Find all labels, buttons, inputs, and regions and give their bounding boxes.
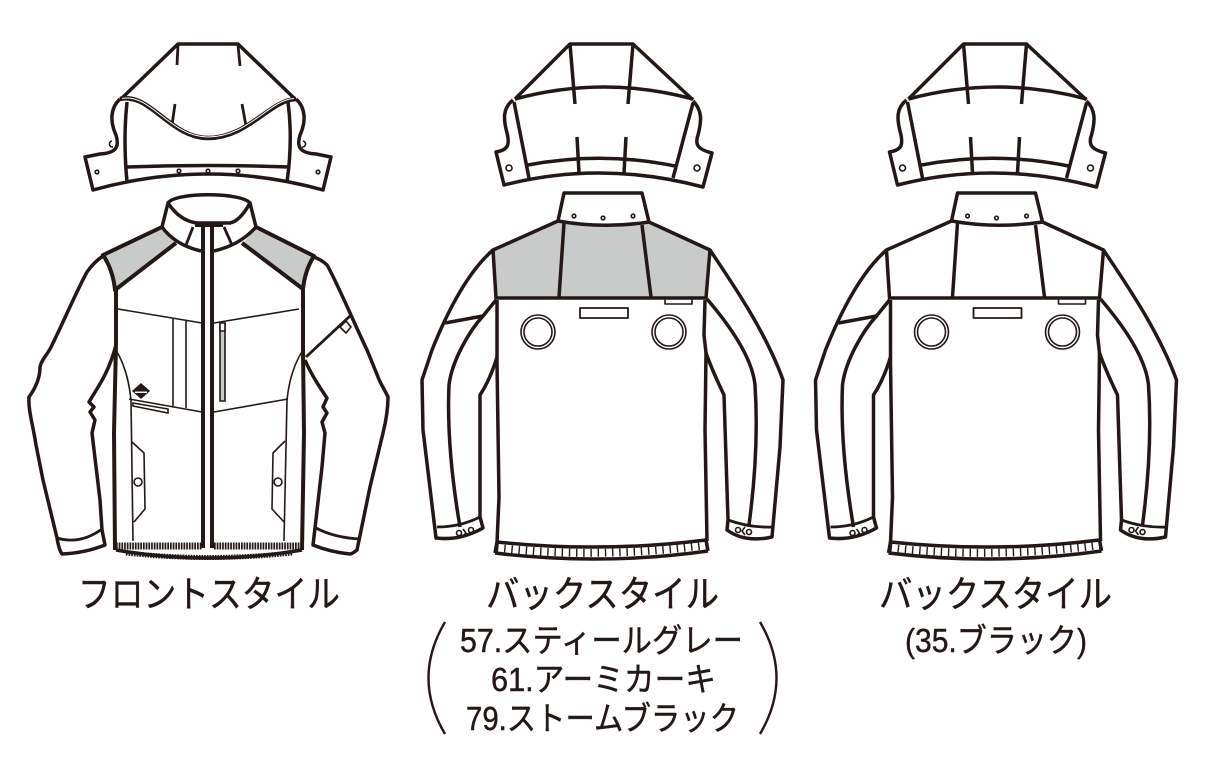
front view: hood — [85, 44, 331, 190]
hem rib — [116, 542, 303, 550]
side pockets — [132, 441, 285, 522]
hood — [496, 44, 712, 187]
back view: hood and jacket — [422, 44, 783, 559]
label: back style 1: バックスタイル — [486, 574, 719, 615]
vents and label — [521, 299, 692, 349]
collar — [162, 195, 256, 251]
sleeves — [29, 256, 116, 554]
colour label: black: (35.ブラック) — [905, 622, 1087, 659]
label: back style 2: バックスタイル — [879, 574, 1112, 615]
chest and pocket seams — [118, 309, 299, 412]
zipper — [195, 225, 223, 548]
back view: black colour version — [816, 44, 1176, 559]
left sleeve — [422, 250, 497, 539]
right sleeve — [706, 250, 783, 539]
shoulders and body seams — [103, 227, 314, 290]
label: front style: フロントスタイル — [78, 574, 340, 615]
colour list — [428, 622, 776, 737]
logo badge — [132, 383, 150, 399]
shoulder panels — [103, 227, 314, 290]
hem rib — [495, 540, 708, 559]
colour list: 57.スティールグレー — [460, 622, 743, 659]
body — [497, 300, 707, 543]
front view: jacket — [29, 195, 388, 558]
yoke — [493, 221, 710, 298]
back view gray yoke — [493, 221, 710, 298]
colour list: 61.アーミカーキ — [491, 661, 716, 698]
collar — [558, 193, 649, 225]
colour list: 79.ストームブラック — [466, 700, 739, 737]
